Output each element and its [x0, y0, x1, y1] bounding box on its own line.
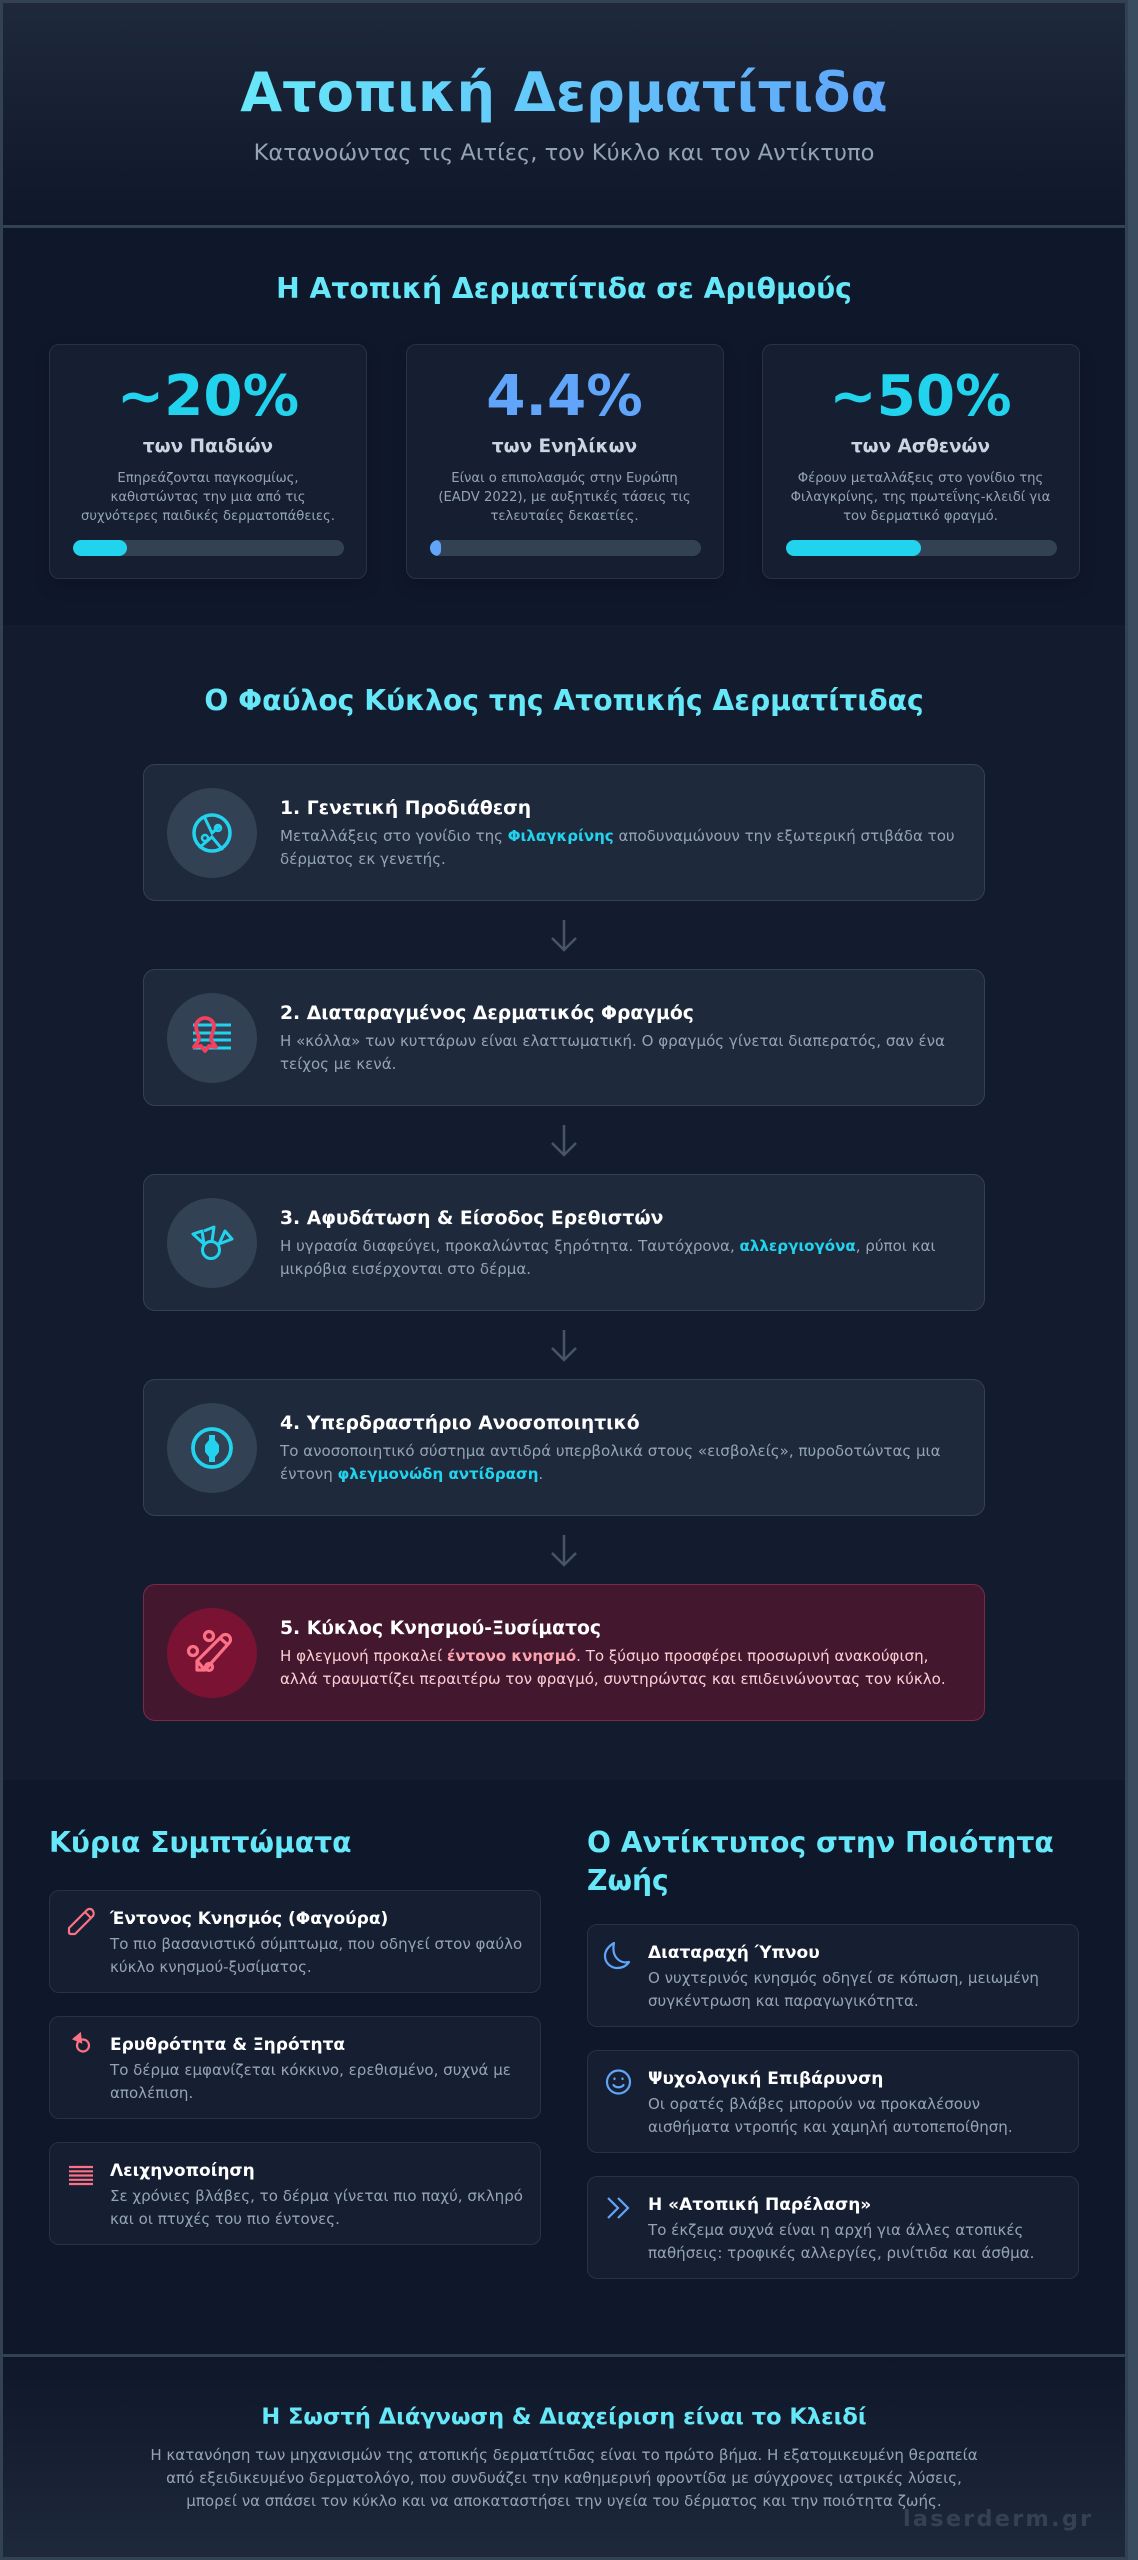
footer text: από εξειδικευμένο δερματολόγο, που συνδυάζει την καθημερινή φροντίδα με σύγχρονες ιατρικές λύσεις,: [166, 2469, 962, 2487]
impact description: συγκέντρωση και παραγωγικότητα.: [648, 1992, 919, 2010]
stat description: Επηρεάζονται παγκοσμίως,: [117, 471, 299, 486]
step description: δέρματος εκ γενετής.: [280, 850, 446, 868]
step description: τείχος με κενά.: [280, 1055, 396, 1073]
step description: [280, 827, 955, 868]
impact card: atopic march: [587, 2176, 1079, 2279]
stat description: συχνότερες παιδικές δερματοπάθειες.: [81, 509, 335, 524]
impact description: [648, 2221, 1034, 2262]
step description: Μεταλλάξεις στο γονίδιο της Φιλαγκρίνης αποδυναμώνουν την εξωτερική στιβάδα του: [280, 827, 955, 845]
stat card: children: [49, 344, 367, 579]
step description: Η υγρασία διαφεύγει, προκαλώντας ξηρότητα. Ταυτόχρονα, αλλεργιογόνα, ρύποι και: [280, 1237, 936, 1255]
arrow down: [551, 1125, 577, 1156]
impact description: Οι ορατές βλάβες μπορούν να προκαλέσουν: [648, 2095, 980, 2113]
symptom description: [110, 1935, 522, 1976]
vicious cycle section background: [0, 625, 1128, 1780]
stat number: ~50%: [829, 364, 1012, 429]
step description: Το ανοσοποιητικό σύστημα αντιδρά υπερβολικά στους «εισβολείς», πυροδοτώντας μια: [280, 1442, 941, 1460]
header section: [0, 0, 1128, 228]
footer text: μπορεί να σπάσει τον κύκλο και να αποκαταστήσει την υγεία του δέρματος και την ποιότητα ζωής.: [186, 2492, 942, 2510]
symptom description: Σε χρόνιες βλάβες, το δέρμα γίνεται πιο παχύ, σκληρό: [110, 2187, 523, 2205]
footer section: [0, 2354, 1128, 2560]
stat card: adults: [406, 344, 724, 579]
impact heading: [587, 1826, 1054, 1897]
step 3: [143, 1174, 985, 1311]
step title: 4. Υπερδραστήριο Ανοσοποιητικό: [280, 1413, 640, 1434]
impact description: Το έκζεμα συχνά είναι η αρχή για άλλες ατοπικές: [648, 2221, 1023, 2239]
symptom description: Το δέρμα εμφανίζεται κόκκινο, ερεθισμένο, συχνά με: [110, 2061, 511, 2079]
step description: έντονη φλεγμονώδη αντίδραση.: [280, 1465, 543, 1483]
impact description: Ο νυχτερινός κνησμός οδηγεί σε κόπωση, μειωμένη: [648, 1969, 1039, 1987]
stat card: patients: [762, 344, 1080, 579]
footer text: [150, 2446, 978, 2510]
statistics section: [0, 228, 1128, 625]
impact description: παθήσεις: τροφικές αλλεργίες, ρινίτιδα και άσθμα.: [648, 2244, 1034, 2262]
step description: μικρόβια εισέρχονται στο δέρμα.: [280, 1260, 531, 1278]
symptom description: Το πιο βασανιστικό σύμπτωμα, που οδηγεί στον φαύλο: [110, 1935, 522, 1953]
progress bar 4.4%: [430, 540, 700, 556]
stat description: καθιστώντας την μια από τις: [111, 490, 305, 505]
symptom title: Έντονος Κνησμός (Φαγούρα): [110, 1909, 388, 1929]
impact description: [648, 2095, 1013, 2136]
subtitle: Κατανοώντας τις Αιτίες, τον Κύκλο και τον Αντίκτυπο: [254, 140, 874, 166]
symptom description: [110, 2187, 523, 2228]
title: Ατοπική Δερματίτιδα: [240, 61, 888, 124]
step 5 highlighted: [143, 1584, 985, 1721]
icon: irritants: [167, 1198, 257, 1288]
step description: Η «κόλλα» των κυττάρων είναι ελαττωματική. Ο φραγμός γίνεται διαπερατός, σαν ένα: [280, 1032, 945, 1050]
impact title: Ψυχολογική Επιβάρυνση: [648, 2069, 883, 2089]
step title: 2. Διαταραγμένος Δερματικός Φραγμός: [280, 1003, 694, 1024]
stat label: των Ασθενών: [851, 436, 990, 457]
step 4: [143, 1379, 985, 1516]
stat description: [438, 471, 691, 524]
symptom card: lichenification: [49, 2142, 541, 2245]
impact heading: Ο Αντίκτυπος στην Ποιότητα: [587, 1826, 1054, 1859]
icon: redness: [72, 2032, 90, 2053]
footer text: Η κατανόηση των μηχανισμών της ατοπικής δερματίτιδας είναι το πρώτο βήμα. Η εξατομικευμένη θεραπεία: [150, 2446, 978, 2464]
impact card: sleep: [587, 1924, 1079, 2027]
arrow down: [551, 1535, 577, 1566]
icon: moon: [604, 1942, 630, 1970]
stat label: των Ενηλίκων: [492, 436, 637, 457]
step description: [280, 1032, 945, 1073]
impact description: αισθήματα ντροπής και χαμηλή αυτοπεποίθηση.: [648, 2118, 1013, 2136]
arrow down: [551, 920, 577, 952]
icon: immune system: [167, 1403, 257, 1493]
progress bar 50%: [786, 540, 1056, 556]
icon: lines: [69, 2166, 93, 2186]
symptom description: [110, 2061, 511, 2102]
impact title: Διαταραχή Ύπνου: [648, 1943, 820, 1963]
impact card: psychological: [587, 2050, 1079, 2153]
icon: pencil: [68, 1908, 95, 1936]
symptom card: redness: [49, 2016, 541, 2119]
step description: Η φλεγμονή προκαλεί έντονο κνησμό. Το ξύσιμο προσφέρει προσωρινή ανακούφιση,: [280, 1647, 928, 1665]
step description: [280, 1442, 941, 1483]
stat description: Φέρουν μεταλλάξεις στο γονίδιο της: [798, 471, 1043, 486]
progress bar 20%: [73, 540, 344, 556]
stat description: Φιλαγκρίνης, της πρωτεΐνης-κλειδί για: [791, 490, 1050, 505]
icon: face: [606, 2069, 632, 2095]
symptom title: Ερυθρότητα & Ξηρότητα: [110, 2035, 345, 2055]
stat description: τον δερματικό φραγμό.: [843, 509, 998, 524]
icon: double chevron: [607, 2197, 630, 2219]
step description: αλλά τραυματίζει περαιτέρω τον φραγμό, συντηρώντας και επιδεινώνοντας τον κύκλο.: [280, 1670, 946, 1688]
impact heading: Ζωής: [587, 1864, 669, 1897]
symptom description: κύκλο κνησμού-ξυσίματος.: [110, 1958, 312, 1976]
symptom title: Λειχηνοποίηση: [110, 2161, 255, 2181]
stat description: τελευταίες δεκαετίες.: [490, 509, 639, 524]
symptoms heading: Κύρια Συμπτώματα: [49, 1826, 352, 1859]
stat number: ~20%: [117, 364, 299, 429]
step description: [280, 1647, 946, 1688]
symptoms and impact section background: [0, 1780, 1128, 2355]
stat description: (EADV 2022), με αυξητικές τάσεις τις: [438, 490, 691, 505]
footer heading: Η Σωστή Διάγνωση & Διαχείριση είναι το Κλειδί: [261, 2404, 867, 2430]
stat number: 4.4%: [486, 364, 643, 429]
step description: [280, 1237, 936, 1278]
impact title: Η «Ατοπική Παρέλαση»: [648, 2195, 871, 2215]
step title: 5. Κύκλος Κνησμού-Ξυσίματος: [280, 1618, 601, 1639]
step 2: [143, 969, 985, 1106]
icon: barrier: [167, 993, 257, 1083]
watermark: laserderm.gr: [903, 2506, 1093, 2532]
symptom description: απολέπιση.: [110, 2084, 193, 2102]
stat description: Είναι ο επιπολασμός στην Ευρώπη: [451, 471, 678, 486]
step title: 3. Αφυδάτωση & Είσοδος Ερεθιστών: [280, 1208, 663, 1229]
cycle heading: Ο Φαύλος Κύκλος της Ατοπικής Δερματίτιδας: [204, 684, 924, 717]
step title: 1. Γενετική Προδιάθεση: [280, 798, 531, 819]
stat description: [81, 471, 335, 524]
impact description: [648, 1969, 1039, 2010]
statistics heading: Η Ατοπική Δερματίτιδα σε Αριθμούς: [276, 272, 852, 305]
step 1: [143, 764, 985, 901]
symptom description: και οι πτυχές του πιο έντονες.: [110, 2210, 340, 2228]
stat label: των Παιδιών: [143, 436, 273, 457]
icon: itch-scratch: [167, 1608, 257, 1698]
stat description: [791, 471, 1050, 524]
symptom card: itch: [49, 1890, 541, 1993]
arrow down: [551, 1330, 577, 1362]
icon: genetic: [167, 788, 257, 878]
